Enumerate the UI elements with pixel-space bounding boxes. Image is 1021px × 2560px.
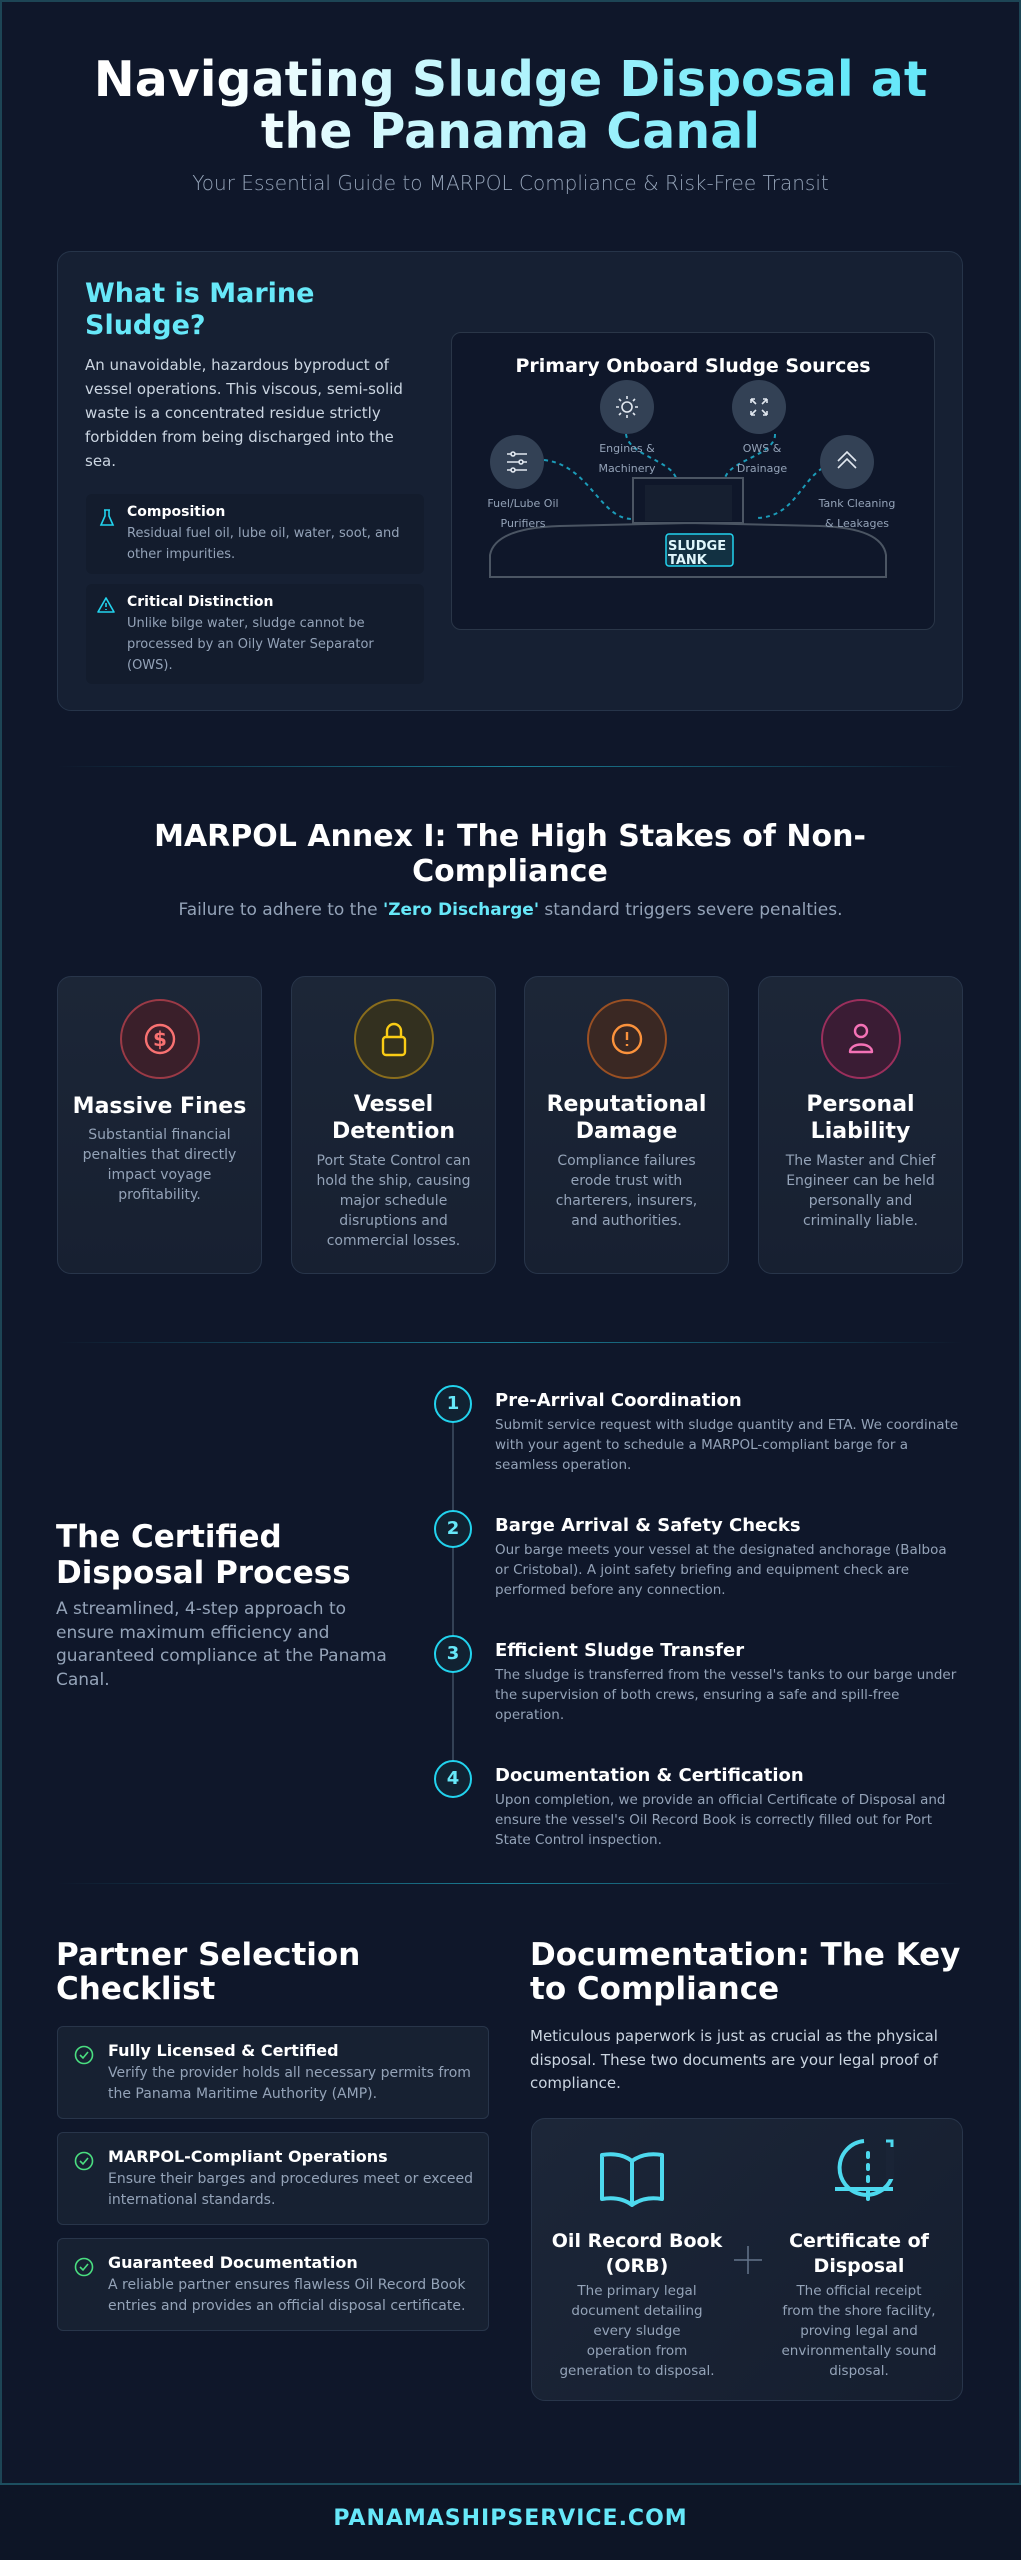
box: composition <box>86 494 424 574</box>
icon: dollar <box>120 999 200 1079</box>
card: vessel detention: Port State Control can hold the ship, causing major schedule disruptions and commercial losses. <box>316 1153 471 1249</box>
checklist item 3 <box>57 2238 489 2331</box>
icon: warning <box>97 597 115 613</box>
chart: primary onboard sludge sources diagram: Purifiers <box>501 517 546 530</box>
icon: plus <box>734 2246 762 2274</box>
document: oil record book: Oil Record Book <box>552 2230 722 2252</box>
box: composition: Residual fuel oil, lube oil, water, soot, and other impurities. <box>127 526 400 562</box>
text: The sludge is transferred from the vessel's tanks to our barge under the supervision of both crews, ensuring a safe and spill-free operation. <box>495 1667 956 1723</box>
checklist item 3: A reliable partner ensures flawless Oil Record Book entries and provides an official disposal certificate. <box>108 2277 465 2314</box>
chart: primary onboard sludge sources diagram: Machinery <box>598 462 656 475</box>
document: certificate of disposal <box>781 2230 936 2379</box>
chart: primary onboard sludge sources diagram: Primary Onboard Sludge Sources <box>515 355 871 377</box>
heading: documentation key to compliance: Documentation: The Key <box>530 1937 960 1973</box>
heading: certified disposal process: Disposal Process <box>56 1555 351 1591</box>
checklist item 2 <box>57 2132 489 2225</box>
chart: primary onboard sludge sources diagram: Engines & <box>599 442 655 455</box>
checklist item 2: MARPOL-Compliant Operations <box>108 2147 388 2166</box>
step 1 <box>434 1385 472 1423</box>
heading: certified disposal process: The Certified <box>56 1519 282 1555</box>
box: critical distinction: Unlike bilge water, sludge cannot be processed by an Oily Water Separator (OWS). <box>127 616 374 673</box>
heading: partner selection checklist <box>56 1937 360 2007</box>
title: Navigating Sludge Disposal at <box>94 51 927 108</box>
text: or Cristobal). A joint safety briefing and equipment check are performed before any connection. <box>495 1562 909 1598</box>
document: oil record book: The primary legal <box>577 2283 697 2299</box>
footer text: website: PANAMASHIPSERVICE.COM <box>333 2506 688 2531</box>
icon: lock <box>354 999 434 1079</box>
heading: what is marine sludge <box>85 278 314 341</box>
title: the Panama Canal <box>261 103 760 160</box>
step 3: 3 <box>447 1643 459 1664</box>
text: Our barge meets your vessel at the designated anchorage (Balboa <box>495 1542 947 1558</box>
document: oil record book: operation from <box>587 2343 687 2359</box>
icon: alert <box>587 999 667 1079</box>
card: personal liability: The Master and Chief Engineer can be held personally and criminally liable. <box>786 1153 935 1229</box>
chart: primary onboard sludge sources diagram <box>451 332 935 630</box>
card: personal liability <box>758 976 963 1274</box>
box: composition: Composition <box>127 504 225 520</box>
heading: what is marine sludge: What is Marine <box>85 278 314 309</box>
heading: certified disposal process <box>56 1519 351 1591</box>
card: reputational damage: Compliance failures erode trust with charterers, insurers, and authorities. <box>556 1153 697 1229</box>
panel: what is marine sludge <box>57 251 963 711</box>
subheading: zero discharge: Failure to adhere to the 'Zero Discharge' standard triggers severe penalties. <box>178 900 842 920</box>
checklist item 3: Guaranteed Documentation <box>108 2253 358 2272</box>
card: vessel detention <box>291 976 496 1274</box>
text: Documentation & Certification <box>495 1765 804 1786</box>
subtitle: Your Essential Guide to MARPOL Compliance & Risk-Free Transit <box>192 171 829 195</box>
heading: MARPOL annex I: MARPOL Annex I: The High Stakes of Non-Compliance <box>154 819 866 889</box>
checklist item 2: Ensure their barges and procedures meet or exceed international standards. <box>108 2171 473 2208</box>
chart: primary onboard sludge sources diagram: Drainage <box>737 462 787 475</box>
chart: primary onboard sludge sources diagram: SLUDGE <box>668 539 726 554</box>
footer <box>0 2483 1021 2560</box>
checklist item 1: Verify the provider holds all necessary permits from the Panama Maritime Authority (AMP). <box>108 2065 471 2102</box>
icon: flask <box>100 509 114 526</box>
icon: dollar: $ <box>153 1027 167 1051</box>
chart: primary onboard sludge sources diagram: Tank Cleaning <box>818 497 895 510</box>
text: definition: An unavoidable, hazardous byproduct of vessel operations. This viscous, semi-solid waste is a concentrated residue strictly forbidden from being discharged into the sea. <box>85 356 403 470</box>
document: certificate of disposal: environmentally sound <box>781 2343 936 2359</box>
card: reputational damage: Reputational <box>547 1092 706 1117</box>
step 4 <box>434 1760 472 1798</box>
document: certificate of disposal: Disposal <box>814 2255 904 2277</box>
step 3 <box>434 1635 472 1673</box>
text: Submit service request with sludge quantity and ETA. We coordinate with your agent to schedule a MARPOL-compliant barge for a seamless operation. <box>495 1417 958 1473</box>
document: oil record book: document detailing <box>571 2303 703 2319</box>
chart: primary onboard sludge sources diagram: OWS & <box>743 442 782 455</box>
heading: documentation key to compliance <box>530 1937 960 2007</box>
document: certificate of disposal: from the shore facility, <box>782 2303 936 2319</box>
card: personal liability: Personal <box>806 1092 915 1117</box>
icon: book <box>600 2152 664 2207</box>
text: Efficient Sludge Transfer <box>495 1640 744 1661</box>
step 1: 1 <box>447 1393 459 1414</box>
card: vessel detention: Vessel <box>354 1092 433 1117</box>
step 2: 2 <box>447 1518 459 1539</box>
document: oil record book: every sludge <box>593 2323 681 2339</box>
box: critical distinction <box>86 584 424 684</box>
document: certificate of disposal: The official receipt <box>796 2283 922 2299</box>
document: certificate of disposal: disposal. <box>829 2363 889 2379</box>
chart: primary onboard sludge sources diagram: TANK <box>668 553 708 568</box>
text: Upon completion, we provide an official Certificate of Disposal and ensure the vessel's Oil Record Book is correctly filled out for Port State Control inspection. <box>495 1792 945 1848</box>
timeline <box>452 1423 454 1760</box>
card: massive fines: Substantial financial penalties that directly impact voyage profitability. <box>83 1127 236 1203</box>
document: oil record book: generation to disposal. <box>559 2363 715 2379</box>
box: critical distinction: Critical Distinction <box>127 594 273 610</box>
chart: primary onboard sludge sources diagram: & Leakages <box>825 517 889 530</box>
title <box>0 54 1021 158</box>
text: process intro: A streamlined, 4-step approach to ensure maximum efficiency and guaranteed compliance at the Panama Canal. <box>56 1599 387 1690</box>
heading: partner selection checklist: Partner Selection <box>56 1937 360 1973</box>
text: documentation intro: Meticulous paperwork is just as crucial as the physical disposal. These two documents are your legal proof of compliance. <box>530 2027 938 2092</box>
card: personal liability: Liability <box>811 1119 910 1144</box>
heading: partner selection checklist: Checklist <box>56 1971 215 2007</box>
card: reputational damage: Damage <box>576 1119 677 1144</box>
step 2 <box>434 1510 472 1548</box>
checklist item 1 <box>57 2026 489 2119</box>
document: certificate of disposal: proving legal and <box>800 2323 918 2339</box>
step 4: 4 <box>447 1768 459 1789</box>
card: reputational damage <box>524 976 729 1274</box>
checklist item 1: Fully Licensed & Certified <box>108 2041 339 2060</box>
document: certificate of disposal: Certificate of <box>789 2230 929 2252</box>
card: vessel detention: Detention <box>332 1119 455 1144</box>
heading: what is marine sludge: Sludge? <box>85 310 206 341</box>
icon: person <box>821 999 901 1079</box>
text: Barge Arrival & Safety Checks <box>495 1515 801 1536</box>
card: massive fines: Massive Fines <box>73 1094 246 1119</box>
heading: documentation key to compliance: to Compliance <box>530 1971 779 2007</box>
panel: documents <box>531 2118 963 2401</box>
document: oil record book <box>552 2230 723 2379</box>
document: oil record book: (ORB) <box>606 2255 668 2277</box>
icon: certificate <box>835 2139 894 2201</box>
card: massive fines <box>57 976 262 1274</box>
text: Pre-Arrival Coordination <box>495 1390 742 1411</box>
chart: primary onboard sludge sources diagram: Fuel/Lube Oil <box>487 497 559 510</box>
